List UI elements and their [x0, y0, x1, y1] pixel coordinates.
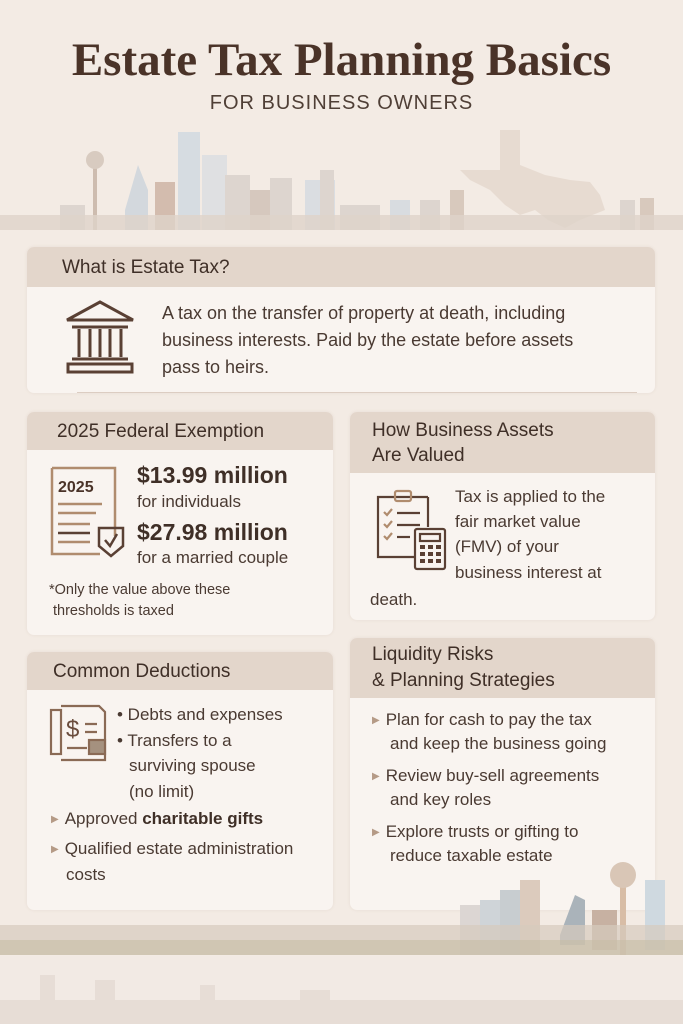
footnote: thresholds is taxed	[53, 603, 174, 619]
text: A tax on the transfer of property at death, including	[162, 303, 565, 323]
heading: What is Estate Tax?	[62, 256, 230, 278]
list: ▶ Review buy-sell agreements	[372, 766, 599, 785]
list: (no limit)	[129, 782, 194, 801]
amounts	[137, 462, 288, 567]
heading: Liquidity Risks	[372, 644, 493, 665]
heading: How Business Assets	[372, 420, 554, 440]
text	[162, 303, 573, 377]
panel: business asset valuation	[350, 412, 655, 620]
amounts: for a married couple	[137, 548, 288, 567]
panel: 2025 federal exemption	[27, 412, 333, 635]
text	[370, 487, 605, 609]
subtitle: FOR BUSINESS OWNERS	[210, 92, 473, 114]
footnote	[49, 582, 230, 619]
heading	[350, 638, 655, 698]
amounts: $13.99 million	[137, 462, 288, 488]
background skyline top	[0, 130, 683, 230]
icon: bank	[66, 300, 134, 374]
panel: liquidity risks	[350, 638, 655, 910]
heading	[27, 412, 333, 450]
list: surviving spouse	[129, 756, 256, 775]
list: ▶ Explore trusts or gifting to	[372, 822, 578, 841]
panel: what is estate tax	[27, 247, 655, 393]
list: reduce taxable estate	[390, 846, 553, 865]
list: • Transfers to a	[117, 731, 232, 750]
panel: common deductions	[27, 652, 333, 910]
list: ▶ Qualified estate administration	[51, 839, 293, 858]
list	[372, 710, 606, 865]
heading: & Planning Strategies	[372, 670, 555, 691]
icon: document 2025	[50, 466, 124, 558]
amounts: for individuals	[137, 492, 241, 511]
text: (FMV) of your	[455, 537, 559, 556]
list	[51, 705, 293, 884]
heading: 2025 Federal Exemption	[57, 420, 264, 442]
title: Estate Tax Planning Basics	[72, 34, 611, 86]
icon: document 2025: 2025	[58, 479, 94, 496]
list: costs	[66, 865, 106, 884]
icon: money document	[50, 704, 106, 762]
text: business interest at	[455, 563, 601, 582]
text: death.	[370, 590, 417, 609]
list: and keep the business going	[390, 734, 606, 753]
amounts: $27.98 million	[137, 519, 288, 545]
bottom skyline	[0, 862, 683, 1024]
heading	[27, 652, 333, 690]
heading: Common Deductions	[53, 660, 230, 682]
heading: Are Valued	[372, 444, 465, 466]
text: business interests. Paid by the estate before assets	[162, 330, 573, 350]
footnote: *Only the value above these	[49, 582, 230, 598]
heading	[350, 412, 655, 473]
list: ▶ Plan for cash to pay the tax	[372, 710, 592, 729]
icon: clipboard calculator	[376, 490, 446, 570]
list: and key roles	[390, 790, 491, 809]
list: ▶ Approved charitable gifts	[51, 809, 263, 828]
icon: money document: $	[66, 716, 79, 743]
text: Tax is applied to the	[455, 487, 605, 506]
text: pass to heirs.	[162, 357, 269, 377]
list: • Debts and expenses	[117, 705, 283, 724]
text: fair market value	[455, 512, 581, 531]
heading	[27, 247, 655, 287]
